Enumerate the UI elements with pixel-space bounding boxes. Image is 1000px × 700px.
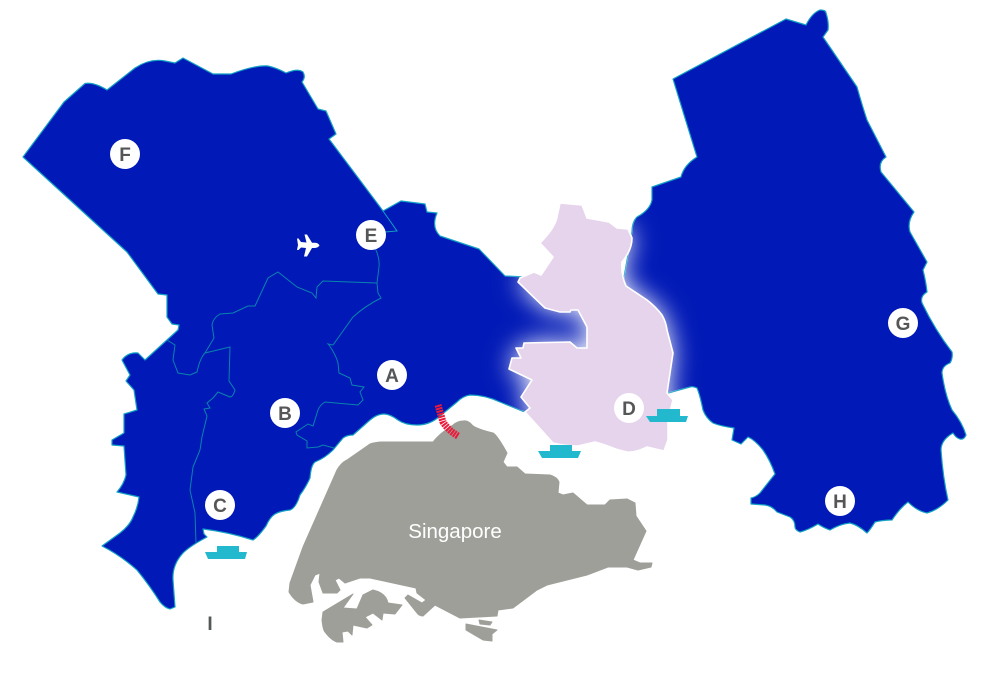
island: Jurong (322, 590, 402, 642)
marker E (356, 220, 386, 250)
marker D: D (622, 399, 636, 420)
marker C: C (213, 496, 227, 517)
marker E: E (365, 226, 377, 247)
region: highlighted zone D (509, 203, 673, 452)
marker F: F (119, 145, 131, 166)
label: Singapore: Singapore (408, 520, 502, 543)
marker I: I (207, 614, 213, 635)
marker F (110, 139, 140, 169)
marker A (377, 360, 407, 390)
marker G: G (896, 314, 910, 335)
island: small south (479, 620, 492, 625)
causeway bridge (438, 405, 458, 436)
marker H: H (833, 492, 847, 513)
ferry icon: centre (538, 445, 581, 458)
marker H (825, 486, 855, 516)
glow around highlighted zone D (509, 203, 673, 452)
marker G (888, 308, 918, 338)
region: east Johor zones G, H (620, 10, 966, 533)
island: south shoal (466, 624, 497, 641)
border: E to B boundary (296, 248, 381, 448)
marker A: A (385, 366, 399, 387)
marker B: B (278, 404, 292, 425)
border: F to B boundary (167, 272, 377, 375)
marker C (205, 490, 235, 520)
ferry icon: west (205, 546, 247, 559)
region: Singapore island (289, 421, 652, 642)
ferry icon: east (646, 409, 688, 422)
region: west Johor zones A, B, C, E, F (23, 58, 600, 609)
border: E outlier (383, 211, 397, 232)
marker D (614, 393, 644, 423)
border: C to B boundary (190, 347, 235, 543)
marker B (270, 398, 300, 428)
airport icon (297, 234, 320, 256)
